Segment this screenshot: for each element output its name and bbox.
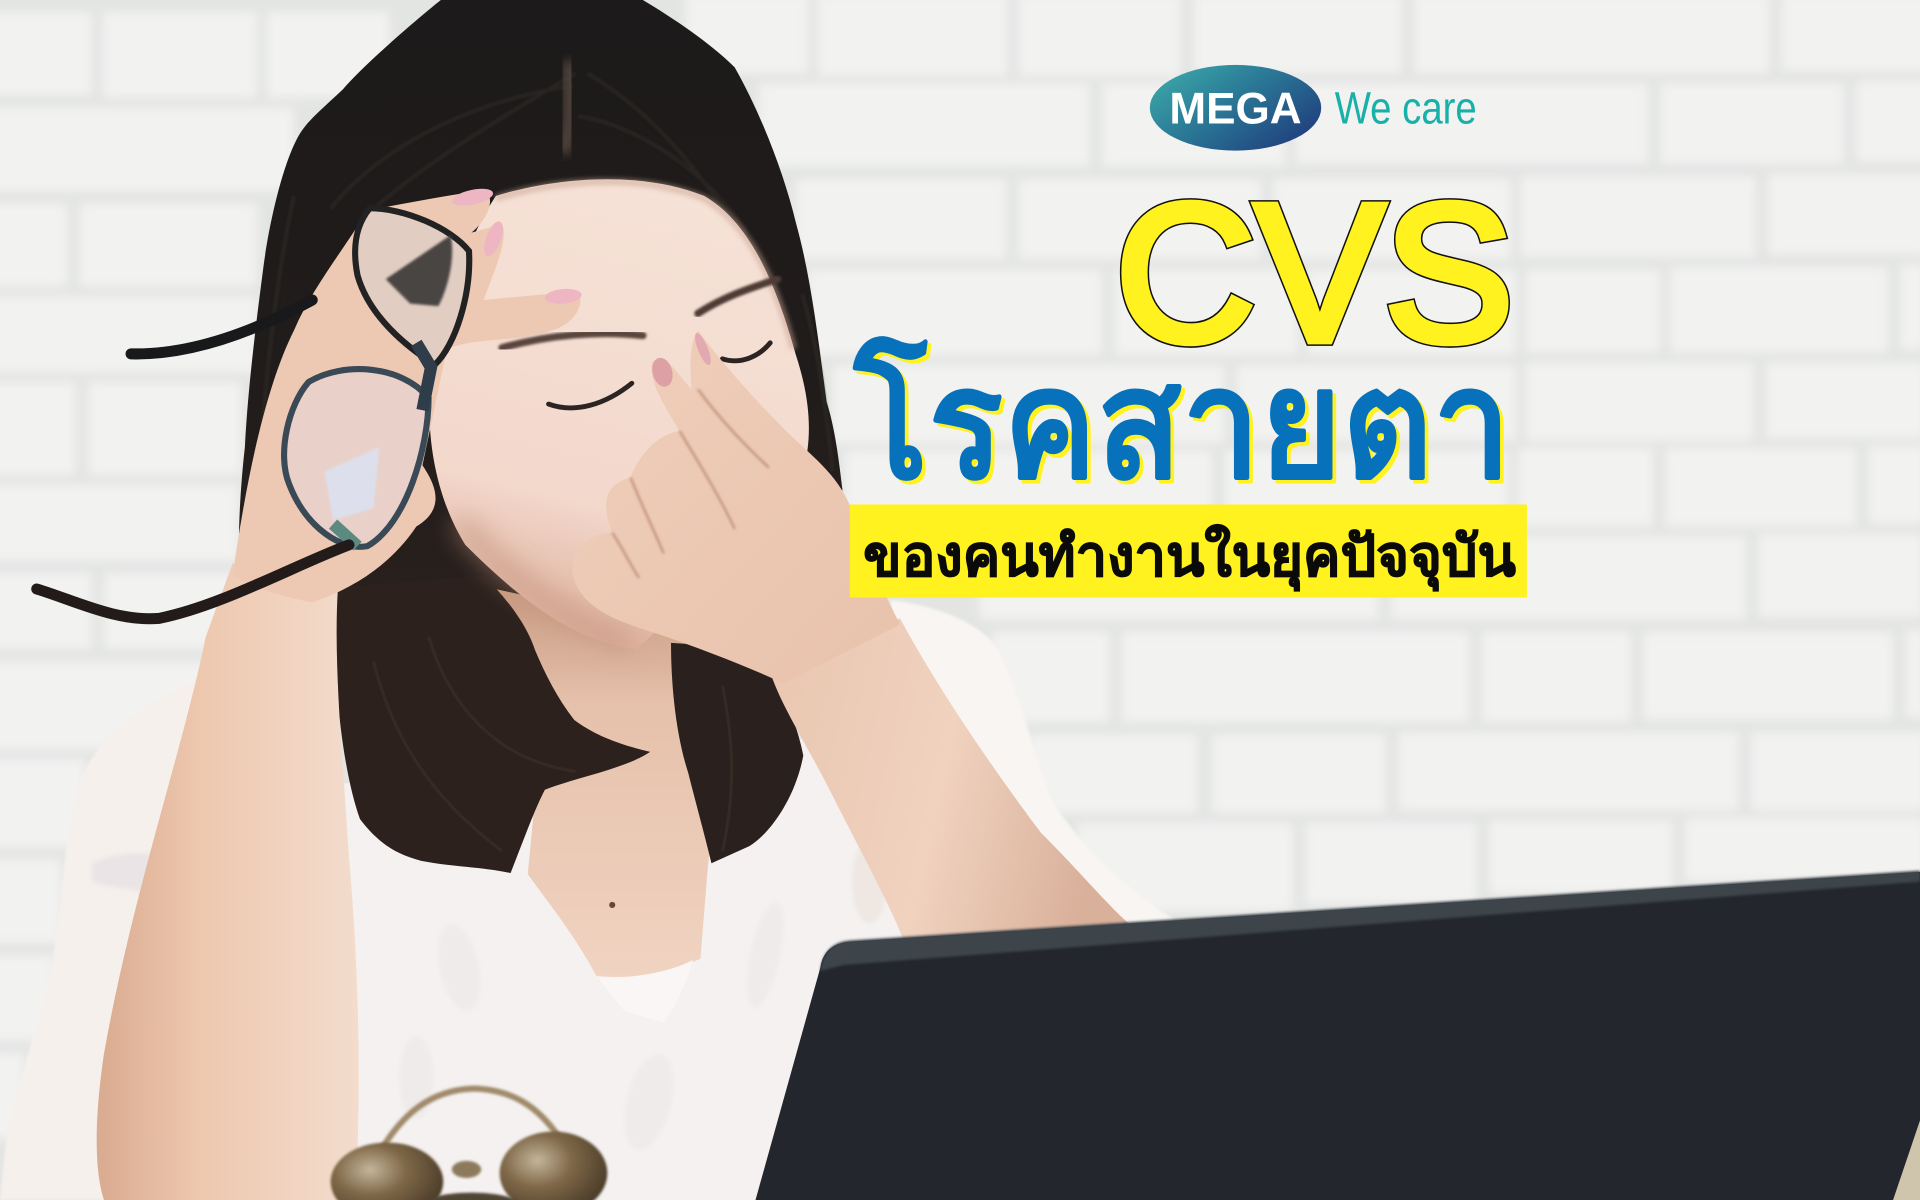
neck and chest	[490, 588, 716, 977]
glasses	[37, 208, 469, 619]
clock: body	[422, 1193, 520, 1200]
hair: parting	[563, 61, 571, 153]
undershirt	[598, 960, 693, 1022]
shirt: sleeve fold	[92, 853, 167, 896]
logo oval	[1150, 65, 1321, 151]
eyebrow right	[698, 279, 778, 313]
glasses: lower lens	[284, 369, 429, 547]
forehead hair shadow	[496, 182, 793, 349]
laptop	[756, 871, 1920, 1200]
hair: lock strands	[373, 637, 732, 851]
glasses: upper temple	[131, 300, 312, 354]
subtitle banner	[850, 504, 1527, 598]
hair: right lock	[671, 643, 803, 863]
logo: MEGA We care	[1150, 65, 1477, 151]
eyebrow left	[502, 333, 643, 348]
glasses: bridge	[416, 343, 431, 410]
logo wordmark: MEGA	[1169, 85, 1302, 134]
left forearm	[97, 563, 359, 1200]
alarm clock	[331, 1089, 607, 1200]
skin mole	[609, 902, 615, 908]
clock: center plate	[452, 1161, 481, 1178]
face	[429, 179, 809, 649]
hair: back	[239, 0, 842, 661]
title: Thai heading: โรคสายตา	[857, 341, 1515, 514]
hair: strands	[257, 73, 833, 514]
clock: right bell	[500, 1131, 607, 1200]
title: Thai heading: โรคสายตา	[853, 338, 1511, 511]
right forearm	[771, 618, 1133, 940]
tagline: We care	[1335, 83, 1477, 134]
laptop: corner background	[1893, 1120, 1920, 1200]
glasses: lower hinge	[333, 524, 358, 546]
eyelash left	[549, 383, 632, 408]
glasses: reflection in upper lens	[386, 235, 452, 306]
finger creases	[612, 389, 769, 578]
subtitle banner: ของคนทำงานในยุคปัจจุบัน	[863, 524, 1516, 592]
right hand	[573, 331, 900, 683]
laptop: top edge	[820, 871, 1920, 971]
glasses: lower temple	[37, 545, 349, 619]
hair: left lock	[333, 576, 650, 873]
shirt: body	[331, 735, 912, 1200]
woman	[0, 0, 1185, 1200]
jaw shadow	[459, 520, 631, 643]
shirt: lace shading	[399, 840, 887, 1155]
laptop: lid	[756, 872, 1920, 1200]
eyelash right	[722, 343, 770, 361]
clock: left bell	[331, 1142, 443, 1200]
title: CVS: CVS	[1116, 163, 1513, 382]
clock: handle	[382, 1089, 558, 1149]
glasses: upper lens	[355, 208, 469, 365]
shirt: right sleeve	[857, 600, 1185, 967]
fingernails	[451, 186, 714, 389]
glasses: reflection in lower lens	[324, 447, 380, 520]
title: CVS: CVS	[1116, 163, 1513, 382]
shirt: left sleeve	[0, 677, 208, 1200]
left hand	[233, 190, 580, 602]
